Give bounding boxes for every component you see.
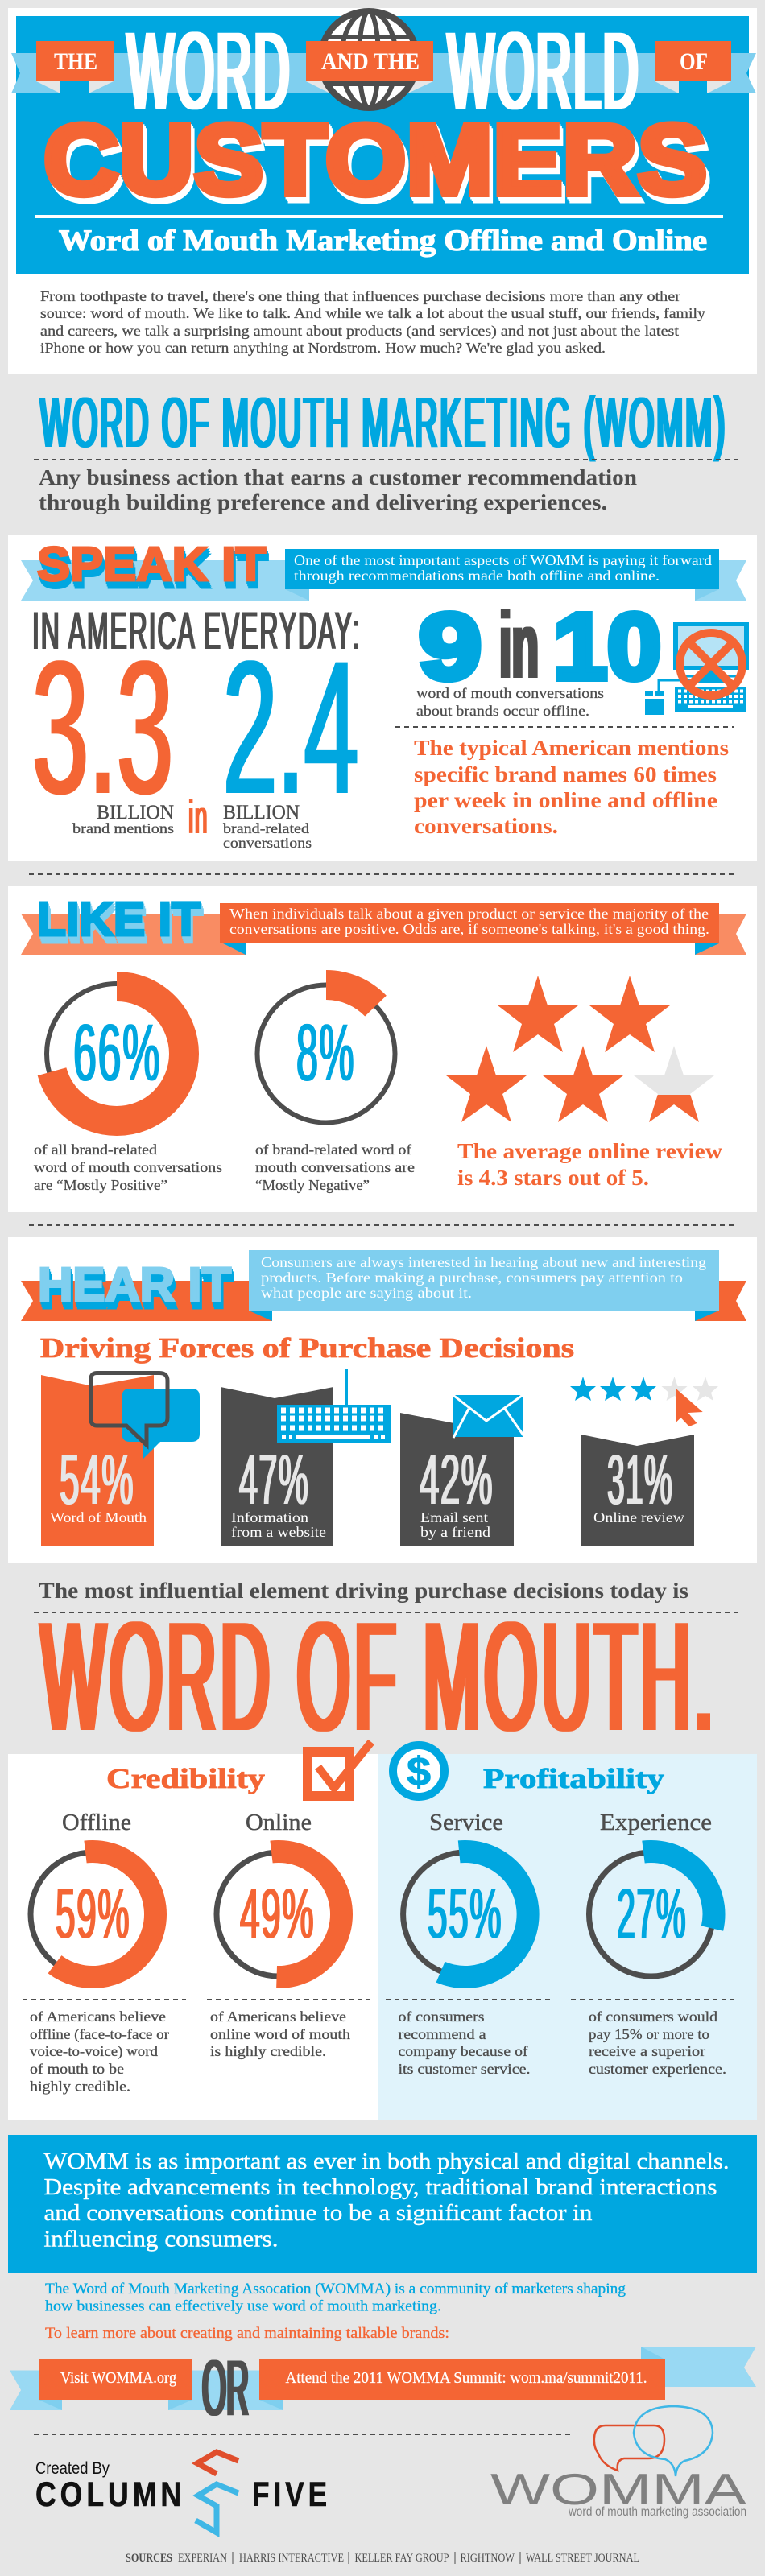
icon: keyboard	[277, 1369, 391, 1443]
heading: Profitability: Profitability	[483, 1763, 665, 1794]
title: CUSTOMERS: CUSTOMERS	[43, 105, 707, 216]
section: conclusion	[34, 1579, 739, 1763]
icon: checkbox	[308, 1742, 371, 1796]
column: service: Service	[429, 1810, 503, 1835]
label: THE	[36, 41, 114, 81]
ribbon text: what people are saying about it.	[261, 1285, 472, 1301]
panel: summary: Despite advancements in technology, traditional brand interactions	[43, 2174, 717, 2200]
callout: 60 times per week: specific brand names 60 times	[414, 762, 717, 786]
panel: profitability	[378, 1745, 757, 2120]
panel: summary: and conversations continue to be a significant factor in	[43, 2200, 593, 2226]
call to action ribbon	[10, 2343, 756, 2432]
column: service	[386, 1810, 550, 2077]
bar: website 47%: Information	[231, 1509, 308, 1525]
stat: 3.3 billion	[32, 621, 174, 836]
definition text: Any business action that earns a customer recommendation	[39, 465, 637, 489]
panel: summary: influencing consumers.	[43, 2227, 279, 2252]
icon: envelope	[451, 1393, 529, 1443]
sources: EXPERIAN	[178, 2552, 227, 2565]
text: about WOMMA: how businesses can effectively use word of mouth marketing.	[45, 2297, 441, 2315]
label: THE: THE	[54, 48, 97, 75]
column: online: is highly credible.	[210, 2043, 326, 2059]
icon: crossed-out computer	[645, 622, 749, 715]
bar: online review 31%	[581, 1435, 694, 1546]
lead-in sentence: The most influential element driving purchase decisions today is	[39, 1579, 688, 1603]
panel: credibility	[8, 1742, 378, 2120]
callout: 60 times per week: per week in online and offline	[414, 788, 717, 812]
stat: 3.3 billion: BILLION	[97, 802, 174, 824]
label: AND THE	[306, 41, 433, 81]
logo: Column Five: Created By	[35, 2459, 110, 2478]
column: offline: highly credible.	[30, 2079, 130, 2095]
sources: SOURCES	[126, 2552, 172, 2565]
column: experience: 27%	[617, 1875, 687, 1953]
bar: online review 31%: 31%	[607, 1441, 673, 1519]
ribbon	[21, 903, 746, 955]
caption: 9 in 10: word of mouth conversations	[416, 685, 604, 701]
column: service: company because of	[398, 2043, 528, 2059]
caption: 8%	[255, 1141, 415, 1193]
intro paragraph	[40, 288, 705, 356]
callout: average review: is 4.3 stars out of 5.	[457, 1166, 649, 1190]
button: visit	[39, 2359, 192, 2400]
ribbon	[21, 549, 746, 601]
icon: globe	[320, 11, 417, 108]
column: experience	[571, 1810, 734, 2077]
bar: website 47%: from a website	[231, 1524, 326, 1540]
caption: 66%: of all brand-related	[34, 1141, 157, 1158]
stat: 3.3 billion: brand mentions	[72, 820, 174, 836]
button: summit: Attend the 2011 WOMMA Summit: wom.ma/summit2011.	[285, 2369, 647, 2387]
column: service: 55%	[428, 1875, 502, 1953]
panel: Like It	[8, 886, 757, 1212]
bar: website 47%: 47%	[239, 1441, 309, 1519]
text: about WOMMA: The Word of Mouth Marketing Assocation (WOMMA) is a community of marketers shaping	[45, 2281, 626, 2297]
sources: KELLER FAY GROUP	[354, 2552, 449, 2565]
column: service: its customer service.	[398, 2061, 530, 2077]
button: visit: Visit WOMMA.org	[60, 2369, 176, 2387]
chart: 66% donut: 66%	[73, 1008, 161, 1098]
caption: 66%: word of mouth conversations	[34, 1159, 222, 1175]
ribbon	[21, 1250, 746, 1321]
column: offline: Offline	[62, 1810, 131, 1835]
icon: dollar coin	[393, 1745, 445, 1797]
caption: 66%	[34, 1141, 222, 1193]
callout: 60 times per week: The typical American mentions	[414, 736, 729, 760]
stat: 2.4 billion: conversations	[223, 835, 312, 851]
callout: 60 times per week: conversations.	[414, 814, 558, 838]
stat: 9 in 10: 9	[419, 594, 482, 699]
ribbon text	[294, 552, 712, 584]
bar: word of mouth 54%: Word of Mouth	[50, 1509, 147, 1525]
panel: header	[8, 8, 757, 374]
caption: 66%: are “Mostly Positive”	[34, 1177, 167, 1193]
column: experience: pay 15% or more to	[589, 2026, 709, 2042]
caption: 9 in 10	[416, 685, 604, 719]
ribbon text	[261, 1254, 706, 1301]
caption: 9 in 10: about brands occur offline.	[416, 703, 589, 719]
caption: 8%: of brand-related word of	[255, 1141, 411, 1158]
stat: 9 in 10: 10	[553, 594, 661, 699]
column: experience: Experience	[600, 1810, 712, 1835]
column: offline: 59%	[56, 1875, 130, 1953]
ribbon text: One of the most important aspects of WOMM is paying it forward	[294, 552, 712, 568]
icon: small stars	[570, 1377, 718, 1401]
bar: email 42%: Email sent	[420, 1509, 488, 1525]
stat: 2.4 billion: BILLION	[223, 802, 300, 824]
header ribbon	[11, 53, 756, 93]
stat: 2.4 billion: 2.4	[223, 621, 358, 834]
definition text	[39, 465, 637, 514]
ribbon text: products. Before making a purchase, consumers pay attention to	[261, 1269, 683, 1286]
panel: header: WORD	[127, 10, 292, 133]
heading: SPEAK IT: SPEAK IT	[37, 538, 266, 591]
panel: Hear It	[8, 1237, 757, 1563]
sources: HARRIS INTERACTIVE	[239, 2552, 344, 2565]
logo: Column Five	[35, 2452, 331, 2533]
column: service: of consumers	[398, 2008, 485, 2025]
label: OF: OF	[680, 48, 708, 75]
icon: cursor	[676, 1389, 703, 1426]
intro paragraph: and careers, we talk a surprising amount about products (and services) and not just about the latest	[40, 323, 679, 340]
bar: email 42%: 42%	[420, 1441, 494, 1519]
stat: 9 in 10	[419, 592, 661, 699]
ribbon text: When individuals talk about a given product or service the majority of the	[229, 906, 709, 922]
column: offline: of Americans believe	[30, 2008, 166, 2025]
logo: WOMMA: WOMMA	[490, 2464, 746, 2514]
column: experience: customer experience.	[589, 2061, 726, 2077]
sources	[126, 2552, 639, 2565]
caption: 8%: “Mostly Negative”	[255, 1177, 370, 1193]
bar: word of mouth 54%: 54%	[60, 1441, 134, 1519]
column: online: 49%	[240, 1875, 315, 1953]
stat: 3.3 billion: 3.3	[32, 621, 173, 834]
column: online: online word of mouth	[210, 2026, 350, 2042]
column: offline: voice-to-voice) word	[30, 2043, 158, 2060]
heading: HEAR IT: HEAR IT	[38, 1258, 231, 1311]
text: about WOMMA	[45, 2281, 626, 2342]
subtitle: Word of Mouth Marketing Offline and Online	[59, 225, 707, 258]
panel: Speak It: in	[188, 791, 209, 844]
heading: Credibility: Credibility	[106, 1763, 266, 1794]
section: WOMM definition	[34, 382, 739, 514]
bar: website 47%	[221, 1387, 333, 1546]
chart: 8% donut	[258, 985, 395, 1122]
column: service: recommend a	[398, 2026, 486, 2042]
panel: summary	[8, 2135, 757, 2273]
chart: 66% donut	[47, 984, 187, 1124]
text: about WOMMA: To learn more about creating and maintaining talkable brands:	[45, 2325, 449, 2342]
bar: email 42%: by a friend	[420, 1524, 490, 1540]
ribbon text	[229, 906, 709, 937]
column: experience: of consumers would	[589, 2008, 717, 2025]
column: offline: of mouth to be	[30, 2061, 124, 2077]
chart: 8% donut: 8%	[296, 1008, 355, 1098]
icon: dollar coin: $	[407, 1749, 431, 1794]
chart: rating stars	[446, 976, 714, 1122]
ribbon text: through recommendations made both offline and online.	[294, 568, 660, 584]
panel: Speak It: IN AMERICA EVERYDAY:	[32, 601, 361, 660]
column: offline: offline (face-to-face or	[30, 2026, 169, 2043]
logo: Column Five: COLUMN	[35, 2475, 185, 2514]
callout: average review	[457, 1139, 723, 1190]
logo: Column Five: FIVE	[252, 2475, 331, 2514]
column: online: of Americans believe	[210, 2008, 346, 2025]
callout: 60 times per week	[414, 736, 729, 838]
sources: WALL STREET JOURNAL	[526, 2552, 639, 2565]
intro paragraph: source: word of mouth. We like to talk. And while we talk a lot about the usual stuff, our friends, family	[40, 305, 705, 321]
ribbon text: Consumers are always interested in hearing about new and interesting	[261, 1254, 706, 1270]
intro paragraph: iPhone or how you can return anything at Nordstrom. How much? We're glad you asked.	[40, 340, 606, 356]
panel: Speak It	[8, 535, 757, 861]
ribbon text: conversations are positive. Odds are, if someone's talking, it's a good thing.	[229, 921, 709, 937]
caption: 8%: mouth conversations are	[255, 1159, 415, 1175]
sources: RIGHTNOW	[461, 2552, 515, 2565]
column: online: Online	[246, 1810, 312, 1835]
stat: 9 in 10: in	[499, 592, 539, 699]
bar: email 42%	[400, 1413, 514, 1546]
heading: LIKE IT: LIKE IT	[37, 893, 201, 946]
button: summit	[259, 2359, 665, 2400]
callout: average review: The average online review	[457, 1139, 723, 1163]
intro paragraph: From toothpaste to travel, there's one thing that influences purchase decisions more than any other	[40, 288, 680, 304]
bar: word of mouth 54%	[41, 1375, 154, 1546]
logo: WOMMA	[490, 2406, 746, 2519]
stat: 2.4 billion	[223, 621, 358, 851]
stat: 2.4 billion: brand-related	[223, 820, 309, 836]
heading: driving forces: Driving Forces of Purchase Decisions	[40, 1332, 574, 1364]
column: offline	[23, 1810, 186, 2095]
definition text: through building preference and delivering experiences.	[39, 490, 607, 514]
bar: online review 31%: Online review	[593, 1509, 684, 1525]
call to action ribbon: OR	[202, 2343, 249, 2432]
label: AND THE: AND THE	[321, 48, 420, 75]
column: online	[207, 1810, 370, 2059]
column: experience: receive a superior	[589, 2043, 705, 2059]
icon: speech bubbles	[90, 1373, 200, 1459]
panel: summary: WOMM is as important as ever in both physical and digital channels.	[43, 2149, 730, 2174]
label: OF	[655, 41, 731, 81]
